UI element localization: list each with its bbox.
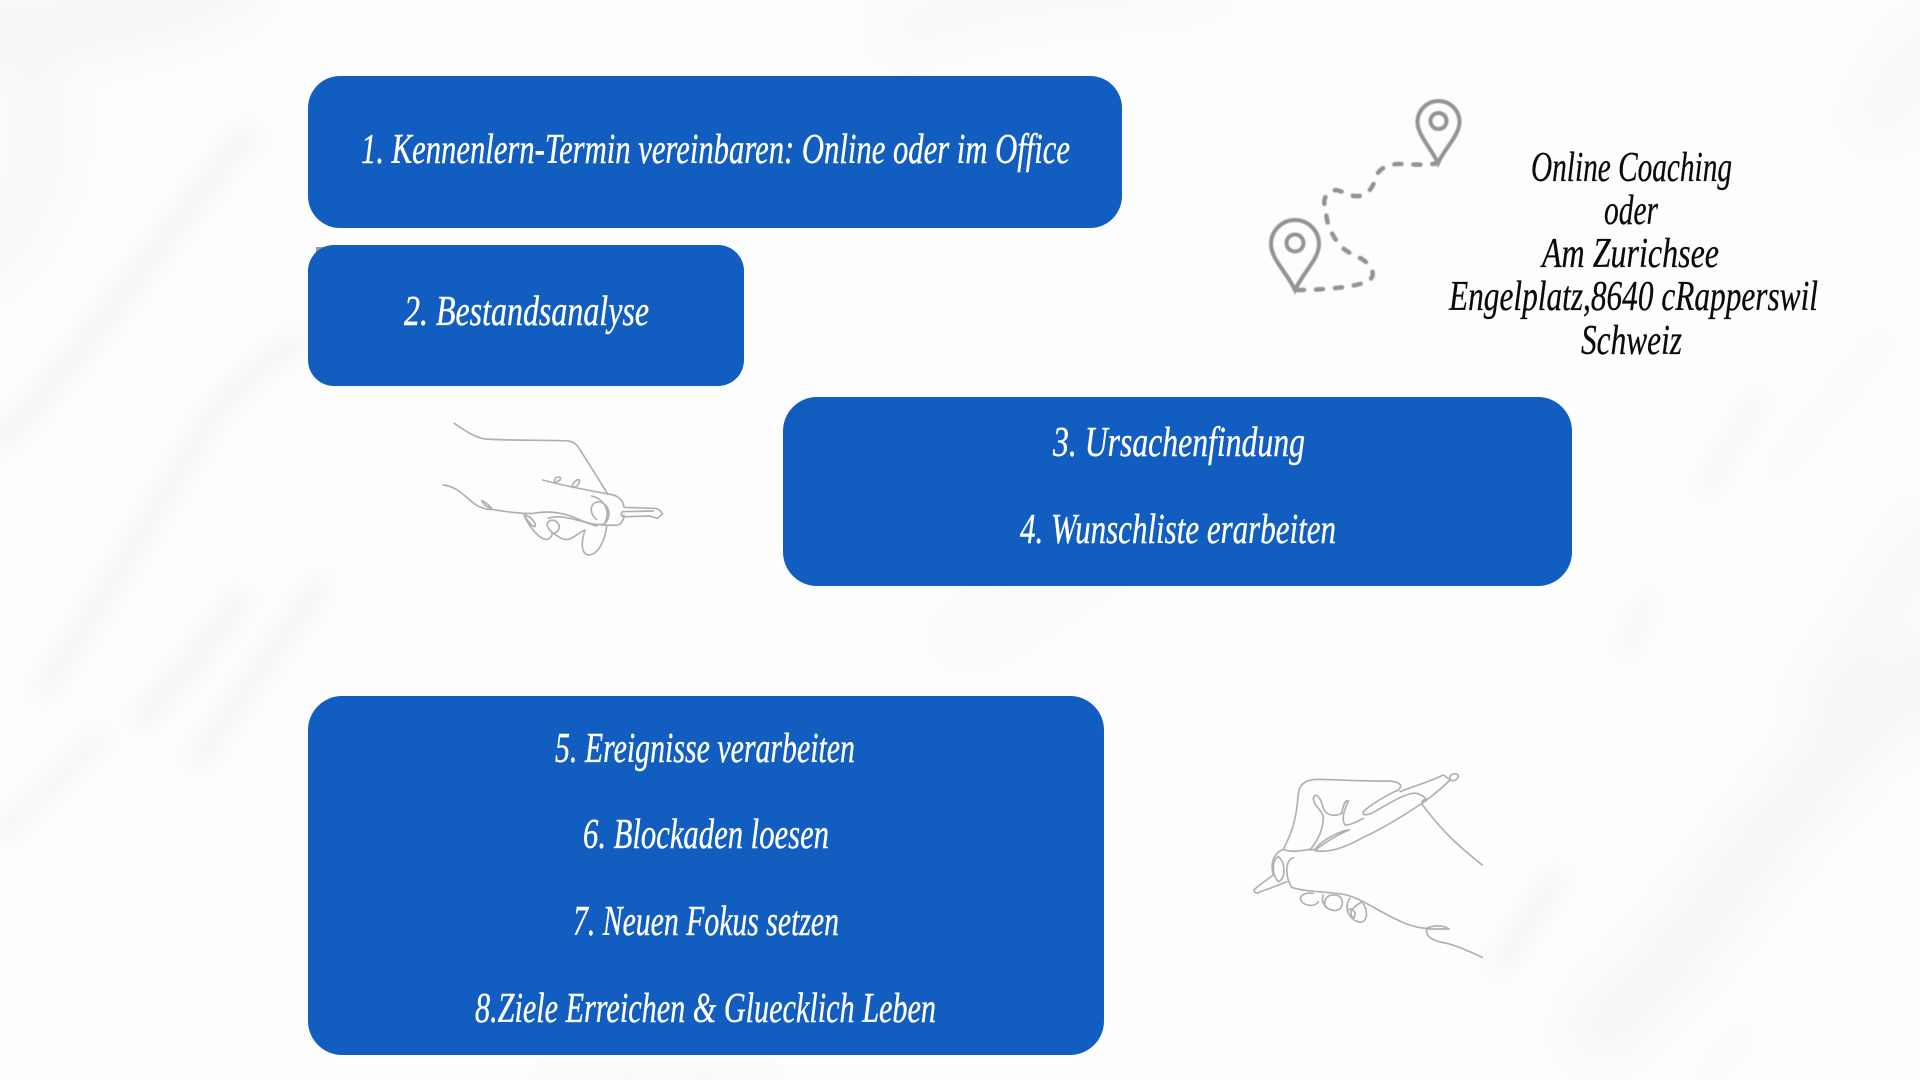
artifact: small grey corner behind step 2: [316, 247, 326, 254]
upper map pin: [1418, 101, 1460, 163]
illustration: line-art hand holding a pen: [1254, 774, 1482, 957]
location text block: oder: [1604, 188, 1658, 234]
lower map pin: [1271, 220, 1319, 290]
location text block: Am Zurichsee: [1540, 231, 1719, 277]
location text block: Online Coaching: [1531, 145, 1732, 191]
location text block: [1448, 145, 1818, 364]
step 8 text: 8.Ziele Erreichen & Gluecklich Leben: [475, 986, 936, 1032]
step 1 box: Kennenlern-Termin: [308, 76, 1122, 228]
step 7 text: 7. Neuen Fokus setzen: [573, 899, 839, 945]
steps 5 to 8 box: [308, 696, 1104, 1055]
step 3 text: 3. Ursachenfindung: [1052, 420, 1305, 466]
step 1 text: 1. Kennenlern-Termin vereinbaren: Online oder im Office: [361, 127, 1070, 173]
location text block: Schweiz: [1581, 318, 1682, 364]
step 5 text: 5. Ereignisse verarbeiten: [555, 726, 855, 772]
illustration: line-art hand holding a key: [443, 423, 663, 555]
step 2 box: Bestandsanalyse: [308, 245, 744, 386]
dashed route: [1297, 163, 1438, 290]
step 2 text: 2. Bestandsanalyse: [404, 289, 649, 335]
icon: route with two map pins: [1271, 101, 1460, 290]
steps 3 and 4 box: [783, 397, 1572, 586]
step 6 text: 6. Blockaden loesen: [583, 812, 829, 858]
step 4 text: 4. Wunschliste erarbeiten: [1020, 507, 1336, 553]
